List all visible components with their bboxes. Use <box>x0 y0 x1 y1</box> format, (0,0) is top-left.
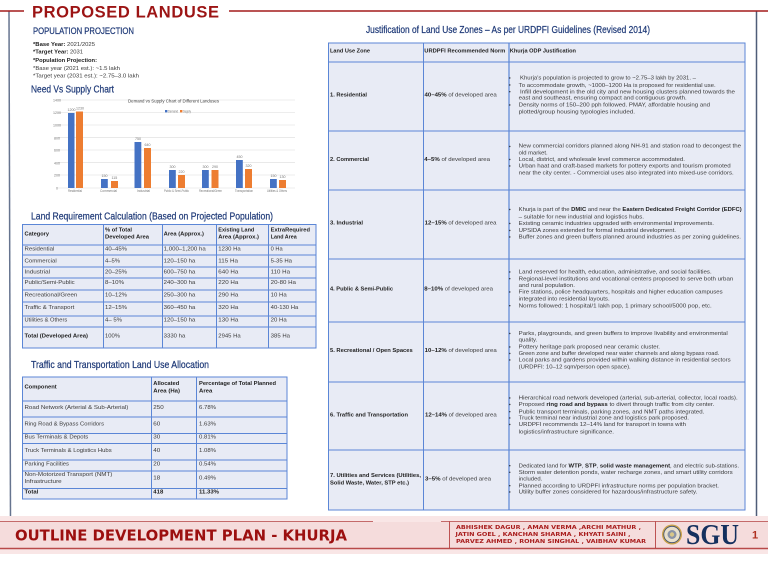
justification text: public and semi-public: Land reserved for health, education, administrative, and social facilities. <box>519 270 712 276</box>
y axis labels: 400 <box>54 161 60 165</box>
chart legend: Demand <box>168 110 178 114</box>
justification text: recreational: Green zone and buffer developed near water channels and along bypass road. <box>519 351 720 357</box>
table header: Category <box>24 231 50 237</box>
justification text: commercial: Local, district, and wholesale level commerce accommodated. <box>519 157 685 163</box>
row: total <box>24 489 219 495</box>
icon: university seal <box>662 524 682 544</box>
row: 7 utilities and services: 3–5% of developed area <box>425 477 492 483</box>
justification text: public and semi-public <box>509 270 733 309</box>
justification text: residential: plotted/group housing typologies included. <box>519 110 635 116</box>
table header: URDPFI Recommended Norm <box>424 49 505 55</box>
data labels: 450 <box>236 155 242 159</box>
heading: need vs supply chart: Need Vs Supply Chart <box>31 85 114 96</box>
justification text: recreational: (URDPFI: 10–12 sqm/person open space). <box>519 364 631 370</box>
row: road network <box>24 405 216 411</box>
row: 1 residential <box>330 75 735 116</box>
justification text: industrial: Khurja is part of the DMIC and near the Eastern Dedicated Freight Corridor (EDFC) <box>519 207 742 213</box>
justification text: public and semi-public: Norms followed: 1 hospital/1 lakh pop, 1 primary school/5000 pop, etc. <box>519 303 712 309</box>
panel: population projection <box>33 26 139 80</box>
row: ring road: Ring Road & Bypass Corridors <box>24 422 104 428</box>
row: ring road: 60 <box>153 422 160 428</box>
row: public/semi-public: 8–10% <box>105 280 124 286</box>
table: justification of land use zones <box>328 43 745 510</box>
justification text: commercial: near the city center. - Commercial uses also integrated into mixed-use corridors. <box>519 171 734 177</box>
justification text: recreational: quality. <box>519 338 538 344</box>
authors <box>454 525 647 545</box>
row: 2 commercial <box>330 144 741 177</box>
heading: land requirement calculation: Land Requirement Calculation (Based on Projected Population) <box>31 212 273 223</box>
justification text: residential: Infill development in the old city and new housing clusters planned towards the <box>520 89 735 95</box>
row: residential: 1,000–1,200 ha <box>164 247 207 253</box>
category labels <box>68 189 287 193</box>
row: 3 industrial <box>330 207 742 240</box>
row: non-motorized transport: 0.49% <box>199 476 216 482</box>
text block: projection figures: *Base year (2021 est.): ~1.5 lakh <box>33 66 120 72</box>
row: industrial: 640 Ha <box>218 269 239 275</box>
y axis labels: 800 <box>54 136 60 140</box>
row: total: 11.33% <box>199 489 219 495</box>
authors: ABHISHEK DAGUR , AMAN VERMA ,ARCHI MATHUR , <box>456 525 641 531</box>
category labels: Residential <box>68 189 82 193</box>
justification text: recreational: Local parks and gardens provided within walking distance in residential sectors <box>519 357 731 363</box>
row: recreational/green: 250–300 ha <box>164 293 196 299</box>
page number: 1 <box>752 530 758 542</box>
row: public/semi-public <box>24 280 297 286</box>
bar chart: demand vs supply <box>53 99 295 193</box>
chart title: Demand vs Supply Chart of Different Landuses <box>128 99 220 104</box>
justification text: utilities: Utility buffer zones considered for hazardous/infrastructure safety. <box>519 490 698 496</box>
row: bus terminals: Bus Terminals & Depots <box>24 434 89 440</box>
row: industrial: 110 Ha <box>271 269 291 275</box>
y axis labels: 1200 <box>53 111 61 115</box>
row: commercial: 115 Ha <box>218 258 239 264</box>
data labels: 115 <box>112 176 117 180</box>
justification text: industrial <box>509 207 742 240</box>
justification text: recreational: Parks, playgrounds, and green buffers to improve livability and environmental <box>519 331 728 337</box>
row: truck terminals: Truck Terminals & Logistics Hubs <box>24 448 112 454</box>
justification text: utilities: included. <box>519 476 543 482</box>
row: total: 385 Ha <box>271 334 291 340</box>
row: 5 recreational / open spaces: 5. Recreational / Open Spaces <box>330 348 413 354</box>
row: traffic & transport: 360–450 ha <box>164 305 196 311</box>
justification text: commercial: New commercial corridors planned along NH-91 and station road to decongest the <box>519 144 741 150</box>
row: recreational/green <box>24 293 288 299</box>
justification text: utilities <box>509 463 739 496</box>
data labels: 290 <box>212 165 218 169</box>
row: road network: 6.78% <box>199 405 216 411</box>
row: total: Total <box>24 489 39 495</box>
row: non-motorized transport: 18 <box>153 476 160 482</box>
row: commercial: Commercial <box>24 258 57 264</box>
justification text: public and semi-public: integrated into residential layouts. <box>519 296 610 302</box>
logo text: SGU <box>686 519 739 551</box>
justification text: traffic: Public transport terminals, parking zones, and NMT paths integrated. <box>519 409 705 415</box>
row: total: 418 <box>153 489 163 495</box>
data labels: 300 <box>170 165 176 169</box>
row: 6 traffic and transportation: 6. Traffic and Transportation <box>330 413 409 419</box>
row: parking: Parking Facilities <box>24 462 69 468</box>
row: public/semi-public: 220 Ha <box>218 280 239 286</box>
row: recreational/green: 10–12% <box>105 293 127 299</box>
justification text: industrial: Buffer zones and green buffers planned around industries as per zoning guidelines. <box>519 234 741 240</box>
table header: Land Area <box>271 234 298 240</box>
justification text: recreational <box>509 331 731 370</box>
row: truck terminals: 1.08% <box>199 448 216 454</box>
justification text: traffic: Hierarchical road network developed (arterial, sub-arterial, collector, local roads). <box>519 396 738 402</box>
table header <box>330 49 577 55</box>
row: residential: 0 Ha <box>271 247 284 253</box>
data labels: 320 <box>246 164 252 168</box>
table header: Existing Land <box>218 228 255 234</box>
table header: Area (Approx.) <box>218 234 259 240</box>
row: 1 residential: 40–45% of developed area <box>424 93 498 99</box>
row: recreational/green: 10 Ha <box>271 293 288 299</box>
justification text: traffic: URDPFI recommends 12–14% land for transport in towns with <box>519 422 686 428</box>
row: residential <box>24 247 284 253</box>
justification text: public and semi-public: Regional-level institutions and vocational centers proposed to serve both urban <box>519 276 733 282</box>
row: traffic & transport: 40-130 Ha <box>271 305 299 311</box>
row: road network: 250 <box>153 405 164 411</box>
data labels: 150 <box>102 174 108 178</box>
row: bus terminals <box>24 434 216 440</box>
row: 6 traffic and transportation <box>330 396 738 435</box>
data labels <box>68 107 286 180</box>
table header: Percentage of Total Planned <box>199 381 277 387</box>
category labels: Utilities & Others <box>267 189 287 193</box>
row: non-motorized transport <box>24 472 216 485</box>
row: residential: Residential <box>24 247 54 253</box>
data labels: 130 <box>280 175 286 179</box>
justification text: traffic: logistics/infrastructure significance. <box>519 429 614 435</box>
table header: % of Total <box>105 228 132 234</box>
category labels: Industrial <box>137 189 150 193</box>
table header: Area (Approx.) <box>164 231 204 237</box>
y axis labels: 1000 <box>53 124 61 128</box>
row: traffic & transport <box>24 305 299 311</box>
y axis labels <box>53 99 61 191</box>
footer band <box>0 516 768 554</box>
justification text: residential: east and southeast, ensuring compact and contiguous growth. <box>519 96 687 102</box>
row: parking: 20 <box>153 462 160 468</box>
justification text: commercial: Urban haat and craft-based markets for pottery exports and tourism promoted <box>519 164 731 170</box>
row: traffic & transport: Traffic & Transport <box>24 305 75 311</box>
supply bars <box>76 112 286 188</box>
authors: JATIN GOEL , KANCHAN SHARMA , KHYATI SAINI , <box>454 532 630 538</box>
title: PROPOSED LANDUSE <box>32 4 219 22</box>
justification text: traffic: Proposed ring road and bypass to divert through traffic from city center. <box>519 402 715 408</box>
heading: justification of land use zones: Justification of Land Use Zones – As per URDPFI Guidelines (Revised 2014) <box>366 25 650 36</box>
row: road network: Road Network (Arterial & Sub-Arterial) <box>24 405 128 411</box>
row: parking <box>24 462 216 468</box>
row: industrial: 600–750 ha <box>164 269 196 275</box>
data labels: 1230 <box>76 107 84 111</box>
row: bus terminals: 30 <box>153 434 160 440</box>
justification text: public and semi-public: Fire stations, police headquarters, hospitals and higher education campuses <box>519 290 723 296</box>
table: land requirement <box>22 224 316 348</box>
heading: population projection: POPULATION PROJECTION <box>33 26 134 37</box>
row: 2 commercial: 4–5% of developed area <box>424 157 491 163</box>
justification text: commercial: old market. <box>519 150 548 156</box>
table header: Developed Area <box>105 234 150 240</box>
row: commercial: 4–5% <box>105 258 120 264</box>
data labels: 150 <box>270 174 276 178</box>
justification text: residential: Khurja's population is projected to grow to ~2.75–3 lakh by 2031. – <box>520 75 697 81</box>
row: ring road <box>24 422 216 428</box>
row: 4 public and semi-public: 4. Public & Semi-Public <box>330 287 393 293</box>
row: total: 2945 Ha <box>218 334 242 340</box>
y axis labels: 600 <box>54 149 60 153</box>
row: 7 utilities and services <box>330 463 739 496</box>
row: 7 utilities and services: 7. Utilities and Services (Utilities, <box>330 473 421 479</box>
row: public/semi-public: Public/Semi-Public <box>24 280 75 286</box>
table header <box>24 381 277 394</box>
justification text: utilities: Dedicated land for WTP, STP, solid waste management , and electric sub-stations. <box>519 463 739 469</box>
category labels: Recreational/Green <box>199 189 222 193</box>
row: residential: 1230 Ha <box>218 247 242 253</box>
table header <box>24 228 311 240</box>
footer title: OUTLINE DEVELOPMENT PLAN - KHURJA <box>15 526 347 544</box>
row: commercial <box>24 258 293 264</box>
justification text: residential: Density norms of 150–200 pph followed. PMAY, affordable housing and <box>519 103 710 109</box>
row: 1 residential: 1. Residential <box>330 93 367 99</box>
row: commercial: 120–150 ha <box>164 258 196 264</box>
row: total <box>24 334 291 340</box>
table header: Allocated <box>153 381 180 387</box>
chart legend: Supply <box>183 110 191 114</box>
table header: Land Use Zone <box>330 49 370 55</box>
row: non-motorized transport: Infrastructure <box>24 479 62 485</box>
row: parking: 0.54% <box>199 462 216 468</box>
text block: projection figures: *Population Projection: <box>33 58 97 64</box>
row: non-motorized transport: Non-Motorized Transport (NMT) <box>24 472 112 478</box>
row: industrial: Industrial <box>24 269 50 275</box>
text block: projection figures: *Target Year: 2031 <box>33 50 83 56</box>
justification text: utilities: Storm water detention ponds, water recharge zones, and smart utility corridors <box>519 470 733 476</box>
row: residential: 40–45% <box>105 247 127 253</box>
row: 5 recreational / open spaces: 10–12% of developed area <box>425 348 498 354</box>
row: 6 traffic and transportation: 12–14% of developed area <box>425 413 498 419</box>
row: utilities & others: 130 Ha <box>218 318 239 324</box>
row: 3 industrial: 3. Industrial <box>330 221 363 227</box>
row: 5 recreational / open spaces <box>330 331 731 370</box>
y axis labels: 1400 <box>53 99 61 103</box>
table header: Area (Ha) <box>153 388 180 394</box>
y axis labels: 0 <box>56 187 58 191</box>
category labels: Transportation <box>235 189 253 193</box>
row: utilities & others: 20 Ha <box>271 318 288 324</box>
data labels: 640 <box>144 143 150 147</box>
row: traffic & transport: 12–15% <box>105 305 127 311</box>
table header: ExtraRequired <box>271 228 311 234</box>
text block: projection figures <box>33 42 139 80</box>
row: industrial <box>24 269 291 275</box>
row: utilities & others: Utilities & Others <box>24 318 68 324</box>
text block: projection figures: *Target year (2031 est.): ~2.75–3.0 lakh <box>33 74 139 80</box>
row: total: 3330 ha <box>164 334 186 340</box>
authors: PARVEZ AHMED , ROHAN SINGHAL , VAIBHAV KUMAR <box>456 539 647 545</box>
row: industrial: 20–25% <box>105 269 127 275</box>
data labels: 300 <box>202 165 208 169</box>
row: utilities & others: 120–150 ha <box>164 318 196 324</box>
row: total: 100% <box>105 334 120 340</box>
row: total: Total (Developed Area) <box>24 334 88 340</box>
justification text: industrial: Existing ceramic industries upgraded with environmental improvements. <box>519 221 714 227</box>
justification text: commercial <box>509 144 741 177</box>
row: commercial: 5-35 Ha <box>271 258 293 264</box>
row: truck terminals: 40 <box>153 448 160 454</box>
table header: Area <box>199 388 213 394</box>
data labels: 750 <box>135 137 141 141</box>
row: truck terminals <box>24 448 216 454</box>
justification text: residential <box>509 75 735 116</box>
justification text: industrial: UPSIDA zones extended for formal industrial development. <box>519 228 676 234</box>
row: recreational/green: Recreational/Green <box>24 293 77 299</box>
row: ring road: 1.63% <box>199 422 216 428</box>
row: utilities & others: 4– 5% <box>105 318 122 324</box>
row: public/semi-public: 240–300 ha <box>164 280 196 286</box>
row: 4 public and semi-public <box>330 270 733 309</box>
justification text: utilities: Planned according to URDPFI infrastructure norms per population bracket. <box>519 483 719 489</box>
row: 2 commercial: 2. Commercial <box>330 157 369 163</box>
justification text: traffic <box>509 396 738 435</box>
row: 3 industrial: 12–15% of developed area <box>425 221 497 227</box>
row: utilities & others <box>24 318 288 324</box>
chart legend <box>165 110 191 114</box>
justification text: public and semi-public: and rural population. <box>519 283 575 289</box>
category labels: Commercial <box>100 189 117 193</box>
table: traffic and transportation <box>22 377 287 499</box>
justification text: residential: To accommodate growth, ~1000–1200 Ha is proposed for residential use. <box>519 83 716 89</box>
justification text: recreational: Pottery heritage park proposed near ceramic cluster. <box>519 345 660 351</box>
text block: projection figures: *Base Year: 2021/2025 <box>33 42 95 48</box>
row: public/semi-public: 20-80 Ha <box>271 280 297 286</box>
category labels: Public & Semi-Public <box>164 189 189 193</box>
justification text: industrial: – suitable for new industrial and logistics hubs. <box>519 214 644 220</box>
demand bars <box>68 113 277 188</box>
heading: traffic and transportation allocation: Traffic and Transportation Land Use Allocation <box>31 360 209 371</box>
row: 4 public and semi-public: 8–10% of developed area <box>424 287 494 293</box>
table header: Khurja ODP Justification <box>510 49 577 55</box>
row: traffic & transport: 320 Ha <box>218 305 239 311</box>
row: bus terminals: 0.81% <box>199 434 216 440</box>
y axis labels: 200 <box>54 174 60 178</box>
row: recreational/green: 290 Ha <box>218 293 239 299</box>
data labels: 220 <box>178 170 184 174</box>
data labels: 1200 <box>68 108 76 112</box>
table header: Component <box>24 384 57 390</box>
row: 7 utilities and services: Solid Waste, Water, STP etc.) <box>330 481 409 487</box>
justification text: traffic: Truck terminal near industrial zone and logistics park proposed. <box>519 416 689 422</box>
